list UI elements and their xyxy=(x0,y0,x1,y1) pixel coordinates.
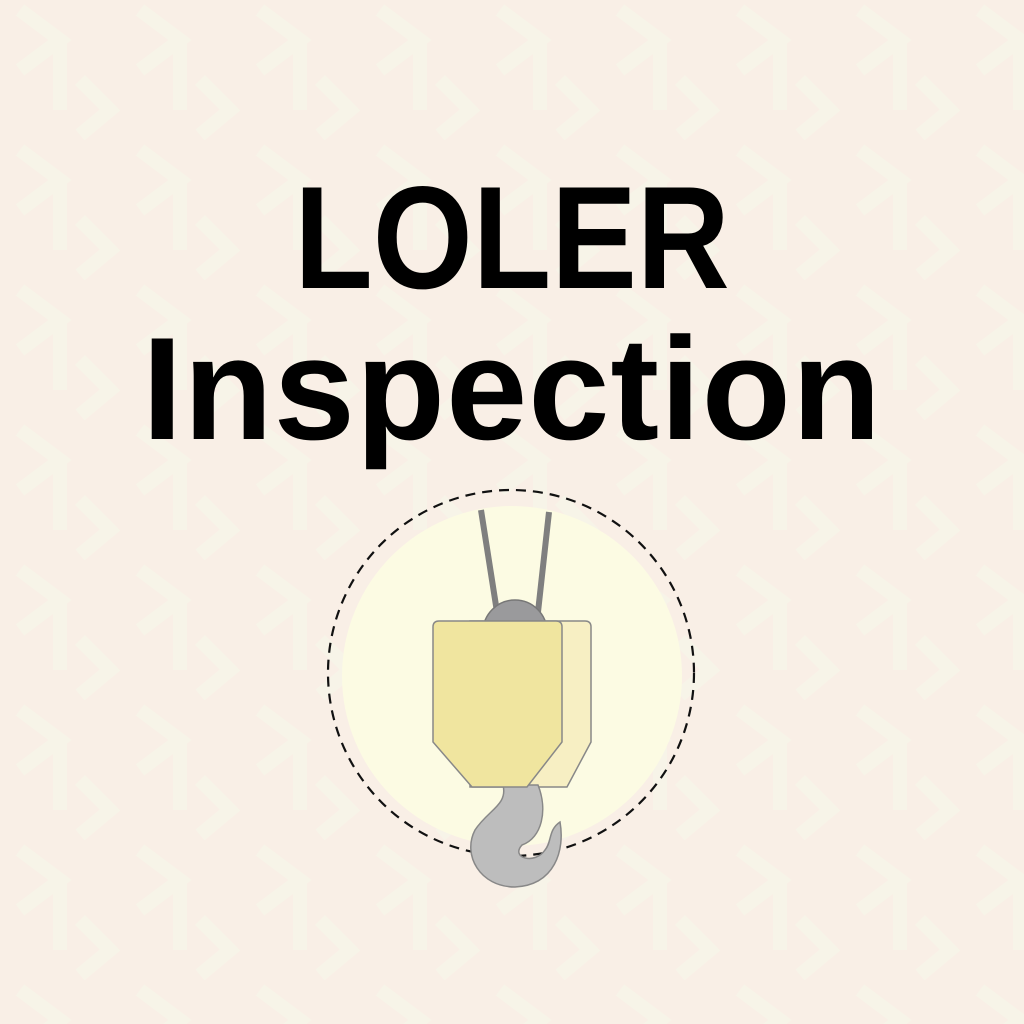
icon background circle xyxy=(328,490,694,856)
back block xyxy=(470,621,591,787)
front block xyxy=(433,621,562,787)
ropes xyxy=(481,510,549,612)
title line 1: LOLER xyxy=(294,156,730,319)
pulley dome xyxy=(483,600,547,664)
hook xyxy=(471,785,561,887)
title line 2: Inspection xyxy=(142,307,882,470)
